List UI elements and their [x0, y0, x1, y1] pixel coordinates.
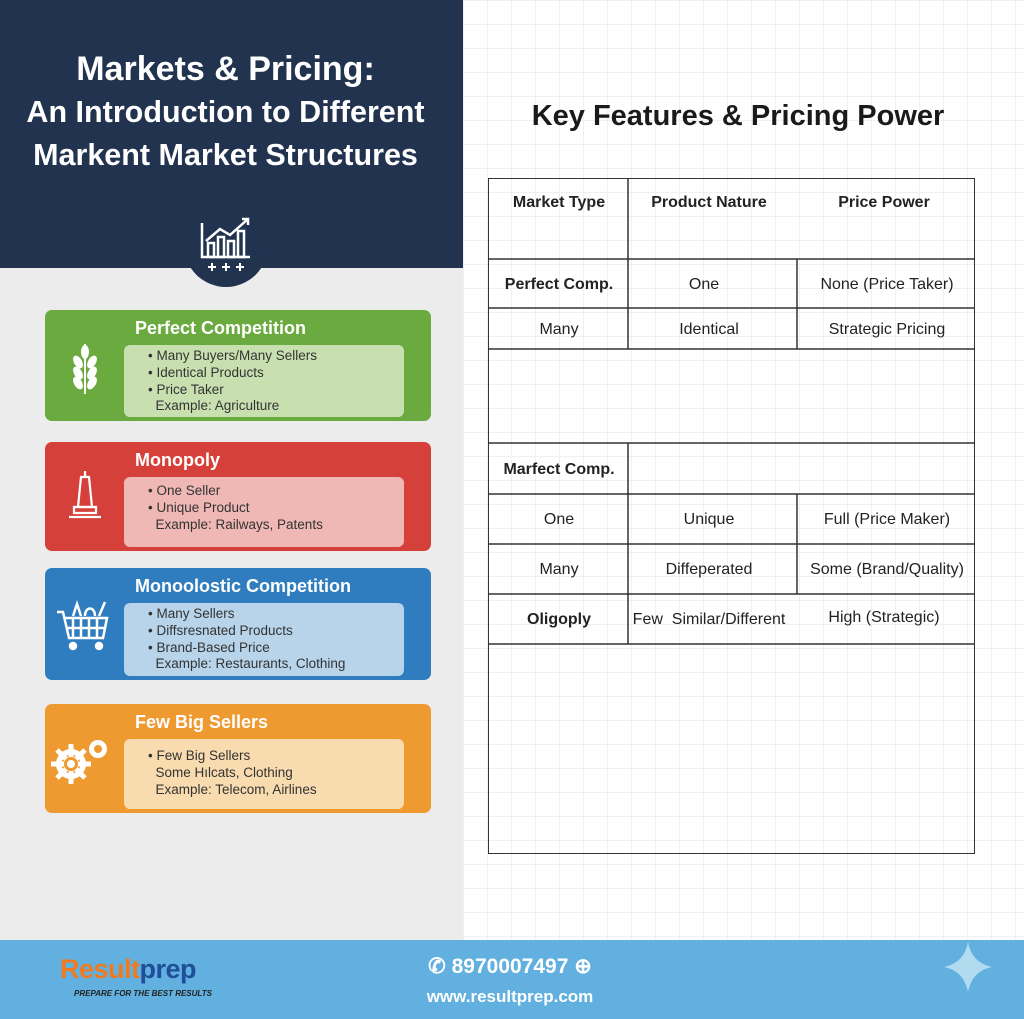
- table: High (Strategic): [828, 609, 940, 626]
- text block: Example: Restaurants, Clothing: [156, 656, 345, 671]
- table: Price Power: [838, 194, 930, 211]
- table: Unique: [684, 511, 734, 528]
- card: perfect competition: Perfect Competition: [135, 318, 306, 338]
- table: Diffeperated: [666, 561, 752, 578]
- text block: [124, 477, 404, 547]
- card: monopolistic: Monoolostic Competition: [135, 576, 351, 596]
- contact: www.resultprep.com: [427, 987, 593, 1006]
- icon: gears: [51, 740, 107, 784]
- icon: sparkle: [944, 942, 992, 992]
- card: monopoly: [45, 442, 431, 551]
- card: perfect competition: [45, 310, 431, 421]
- text block: • One Seller: [148, 483, 220, 498]
- title: Markent Market Structures: [33, 138, 418, 172]
- table: None (Price Taker): [820, 276, 954, 292]
- contact: ✆ 8970007497 ⊕: [428, 955, 592, 978]
- logo: Resultprep: [60, 954, 196, 984]
- text block: Example: Agriculture: [156, 398, 279, 413]
- table: Perfect Comp.: [505, 276, 613, 292]
- card: few big sellers: Few Big Sellers: [135, 712, 268, 732]
- text block: [124, 603, 404, 676]
- card: few big sellers: [45, 704, 431, 813]
- table: Marfect Comp.: [503, 460, 615, 478]
- table: One: [689, 276, 719, 292]
- text block: • Identical Products: [148, 365, 264, 380]
- logo: [60, 954, 212, 998]
- table: Product Nature: [651, 194, 767, 211]
- logo: PREPARE FOR THE BEST RESULTS: [74, 989, 212, 998]
- header panel: [0, 0, 463, 268]
- title: Markets & Pricing:: [76, 50, 375, 88]
- title: An Introduction to Different: [26, 95, 425, 129]
- table: Identical: [679, 320, 739, 338]
- table: One: [544, 511, 574, 528]
- right grid panel: [463, 0, 1024, 940]
- text block: • Many Buyers/Many Sellers: [148, 348, 317, 363]
- table: Some (Brand/Quality): [810, 561, 964, 578]
- text block: • Many Sellers: [148, 606, 235, 621]
- table: Many: [539, 561, 579, 578]
- text block: [124, 345, 404, 417]
- text block: • Few Big Sellers: [148, 748, 250, 763]
- text block: Example: Railways, Patents: [156, 517, 323, 532]
- table: [488, 178, 975, 854]
- text block: [124, 739, 404, 809]
- table: Market Type: [513, 194, 605, 211]
- left background: [0, 0, 463, 940]
- footer: [0, 940, 1024, 1019]
- card: monopoly: Monopoly: [135, 450, 220, 470]
- contact: [426, 955, 593, 1006]
- text block: Some Hılcats, Clothing: [156, 765, 293, 780]
- title: [26, 50, 425, 172]
- table: Few Similar/Different: [633, 611, 785, 628]
- card: monopolistic: [45, 568, 431, 680]
- table: Many: [539, 320, 579, 338]
- text block: • Brand-Based Price: [148, 640, 270, 655]
- text block: • Price Taker: [148, 382, 224, 397]
- table: Oligoply: [527, 611, 591, 628]
- icon: wheat: [73, 344, 97, 394]
- table: Strategic Pricing: [829, 320, 945, 338]
- icon: tower: [69, 471, 101, 518]
- heading: key features: Key Features & Pricing Power: [532, 100, 944, 132]
- text block: • Unique Product: [148, 500, 250, 515]
- icon: chart circle: [184, 203, 268, 287]
- table: Full (Price Maker): [824, 511, 950, 528]
- text block: • Diffsresnated Products: [148, 623, 293, 638]
- icon: cart: [57, 600, 108, 650]
- text block: Example: Telecom, Airlines: [156, 782, 317, 797]
